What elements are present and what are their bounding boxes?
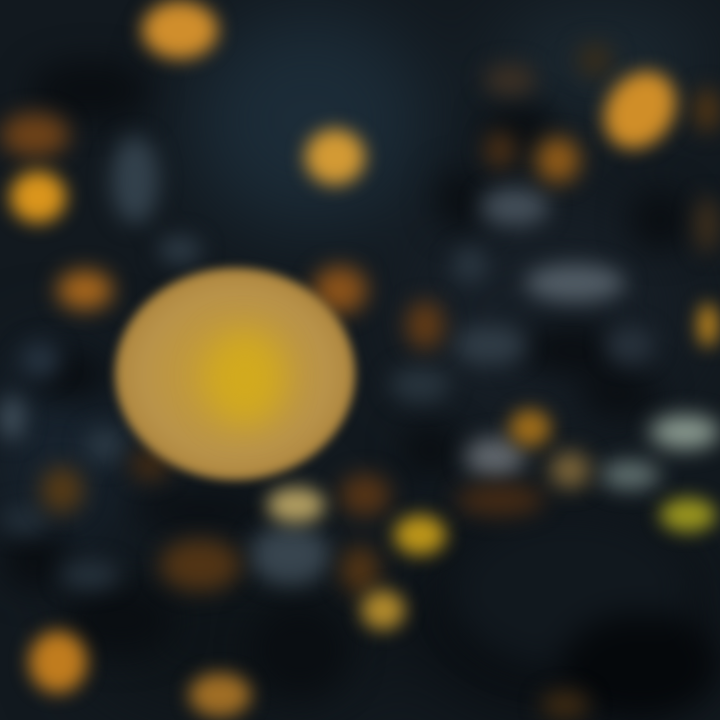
coin disc bbox=[115, 268, 355, 480]
gold coin bbox=[115, 268, 355, 480]
coin centre symbol bbox=[207, 332, 283, 424]
slate grey fragments bbox=[0, 136, 720, 589]
